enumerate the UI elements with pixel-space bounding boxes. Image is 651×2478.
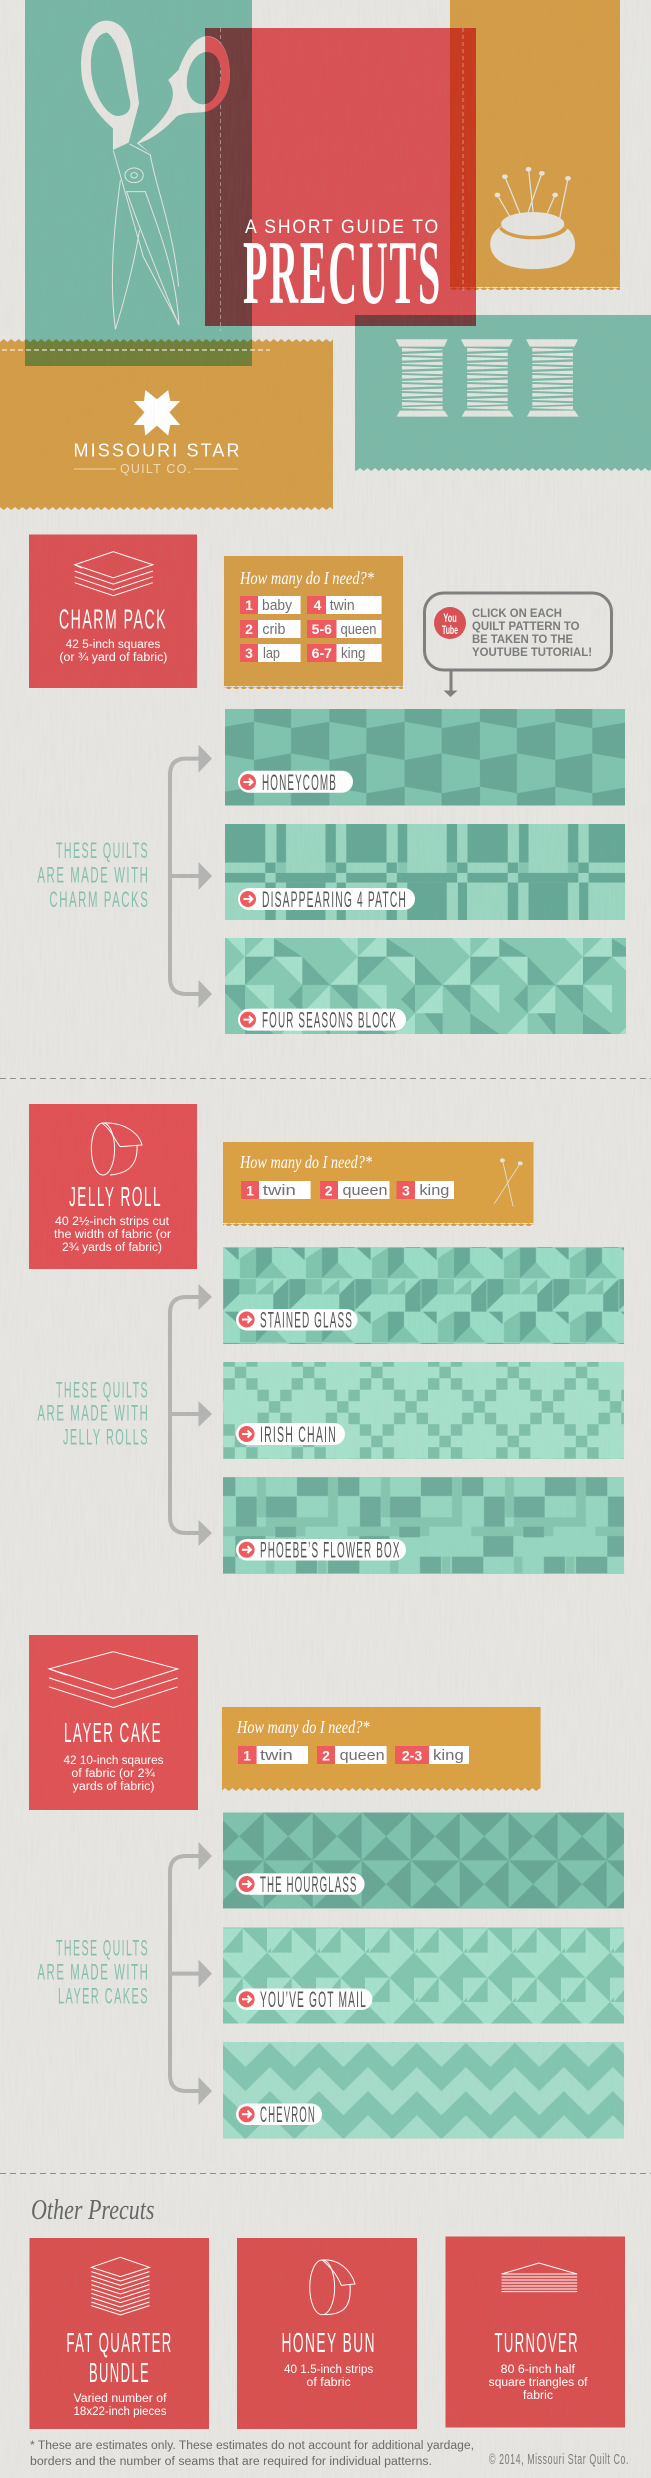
label pill [238, 770, 353, 795]
panel: honey bun: HONEY BUN [282, 2327, 376, 2358]
quilt: disappearing 4 patch [225, 824, 625, 920]
olive overlap strip [25, 339, 252, 366]
quilt: irish chain [223, 1362, 624, 1459]
label pill [236, 1538, 406, 1563]
callout text: QUILT PATTERN TO [472, 621, 580, 633]
size chips: queen [340, 1747, 385, 1764]
footnote: borders and the number of seams that are required for individual patterns. [30, 2456, 432, 2468]
heading: CHARM PACK [59, 604, 167, 634]
panel: charm pack [29, 534, 197, 688]
description: square triangles of [489, 2377, 588, 2389]
description: 2¾ yards of fabric) [62, 1242, 162, 1254]
description: 80 6-inch half [501, 2364, 576, 2376]
size chips: 2 [245, 621, 253, 637]
panel: honey bun [237, 2238, 417, 2429]
icon: stacked fat quarters [91, 2257, 149, 2315]
title: a short guide to: A SHORT GUIDE TO [245, 217, 440, 238]
panel: layer cake: LAYER CAKE [64, 1717, 162, 1748]
arrow bracket [170, 1284, 212, 1546]
description: 18x22-inch pieces [74, 2406, 167, 2418]
description [489, 2364, 588, 2402]
section: other precuts [30, 2194, 629, 2468]
size chips [238, 1746, 469, 1764]
size chips: 3 [245, 645, 253, 661]
description: yards of fabric) [73, 1781, 155, 1793]
description [74, 2393, 167, 2418]
size chips: 1 [245, 597, 253, 613]
panel: how many do I need [222, 1707, 541, 1791]
side label: ARE MADE WITH [37, 1960, 149, 1984]
icon: scissors [81, 21, 230, 329]
label pill [236, 1422, 345, 1447]
label pill [236, 1308, 358, 1332]
arrow bracket [170, 1842, 212, 2105]
size chips: king [341, 645, 365, 662]
size chips: twin [260, 1747, 293, 1764]
icon: knitting needles [494, 1158, 523, 1207]
panel: jelly roll [29, 1104, 197, 1269]
panel: fat quarter bundle: FAT QUARTER [66, 2327, 173, 2358]
quilt: you've got mail: YOU’VE GOT MAIL [260, 1987, 367, 2012]
icon: layered squares [49, 1652, 178, 1707]
side label [37, 1936, 149, 2008]
side label: ARE MADE WITH [37, 862, 149, 888]
wordmark: MISSOURI STAR [74, 440, 240, 460]
quilt: chevron: CHEVRON [260, 2102, 316, 2127]
header collage [0, 0, 651, 510]
size chips: 2-3 [402, 1748, 422, 1764]
quilt: the hourglass [223, 1812, 624, 1908]
description: 40 2½-inch strips cut [55, 1216, 170, 1228]
description [64, 1755, 164, 1793]
quilt: phoebe's flower box [223, 1477, 624, 1574]
size chips: 3 [402, 1182, 410, 1198]
side label: ARE MADE WITH [37, 1400, 149, 1426]
heading: How many do I need?* [236, 1717, 370, 1737]
heading: How many do I need?* [239, 568, 374, 588]
label pill [236, 1987, 372, 2012]
callout: youtube tutorial [424, 593, 612, 697]
size chips: 4 [314, 597, 322, 613]
description: 40 1.5-inch strips [284, 2364, 374, 2376]
quilt: phoebe's flower box: PHOEBE’S FLOWER BOX [260, 1538, 401, 1563]
section: layer cake: LAYER CAKES [58, 1984, 149, 2008]
icon: star [134, 390, 180, 436]
panel: layer cake [29, 1635, 198, 1810]
description: the width of fabric (or [54, 1229, 171, 1241]
callout text: BE TAKEN TO THE [472, 634, 573, 646]
logo: Missouri Star Quilt Co [74, 390, 240, 476]
heading: BUNDLE [89, 2357, 150, 2388]
quilt: stained glass: STAINED GLASS [260, 1308, 353, 1332]
quilt: honeycomb [225, 709, 625, 806]
size chips [241, 1181, 454, 1199]
side label: CHARM PACKS [49, 887, 149, 912]
footnote: * These are estimates only. These estimates do not account for additional yardage, [30, 2440, 474, 2452]
size chips: queen [342, 1182, 388, 1199]
size chips: queen [340, 621, 376, 638]
description: 42 10-inch sqaures [64, 1755, 164, 1767]
icon: youtube: Tube [442, 623, 458, 637]
icon: fabric roll [91, 1123, 142, 1175]
section: layer cake: THESE QUILTS [56, 1936, 149, 1960]
icon: youtube: You [443, 611, 457, 625]
footnote [30, 2440, 474, 2468]
red title panel [205, 28, 476, 326]
label pill [236, 2102, 322, 2127]
description: (or ¾ yard of fabric) [59, 652, 168, 664]
teal scissors panel [25, 0, 252, 366]
description [284, 2364, 374, 2389]
section: charm pack: THESE QUILTS [56, 838, 149, 863]
side label [37, 838, 149, 912]
description: Varied number of [74, 2393, 167, 2405]
section: jelly roll: JELLY ROLLS [63, 1424, 149, 1450]
description: of fabric (or 2¾ [71, 1768, 155, 1780]
heading: How many do I need?* [239, 1152, 372, 1172]
quilt: disappearing 4 patch: DISAPPEARING 4 PATCH [262, 887, 407, 912]
tagline: QUILT CO. [120, 462, 191, 476]
description [54, 1216, 171, 1254]
icon: fabric roll [310, 2260, 355, 2315]
quilt: stained glass [223, 1247, 624, 1344]
icon: stacked triangles [502, 2263, 577, 2292]
section: jelly roll: THESE QUILTS [56, 1378, 149, 1402]
label pill: HONEYCOMB [262, 770, 337, 795]
size chips: 2 [322, 1748, 330, 1764]
quilt: four seasons block [225, 938, 626, 1034]
teal spools panel [355, 315, 651, 471]
side label [37, 1378, 149, 1450]
mustard pincushion panel [450, 0, 620, 290]
description: fabric [523, 2390, 553, 2402]
section: jelly roll [29, 1104, 624, 1574]
callout text: CLICK ON EACH [472, 608, 562, 620]
size chips [240, 596, 382, 662]
size chips: king [433, 1747, 464, 1764]
heading: Other Precuts [31, 2194, 154, 2226]
size chips: 5-6 [312, 621, 332, 637]
description: of fabric [306, 2377, 351, 2389]
size chips: crib [262, 621, 285, 638]
callout text [472, 608, 592, 659]
size chips: 6-7 [312, 645, 332, 661]
size chips: twin [330, 597, 355, 614]
size chips: 2 [325, 1182, 333, 1198]
size chips: 1 [246, 1182, 254, 1198]
size chips: baby [262, 597, 292, 614]
panel: jelly roll: JELLY ROLL [69, 1181, 162, 1212]
label pill [238, 887, 415, 912]
mustard logo panel [0, 339, 333, 510]
size chips: king [419, 1182, 449, 1199]
section: charm pack [29, 534, 626, 1034]
size chips: lap [263, 645, 280, 662]
panel: fat quarter bundle [30, 2238, 209, 2429]
icon: pincushion [490, 167, 575, 269]
quilt: chevron [223, 2042, 624, 2139]
quilt: four seasons block: FOUR SEASONS BLOCK [262, 1007, 397, 1032]
quilt: you've got mail [223, 1928, 624, 2024]
size chips: twin [263, 1182, 296, 1199]
description [59, 639, 168, 664]
callout text: YOUTUBE TUTORIAL! [472, 647, 592, 659]
section: layer cake [29, 1635, 624, 2139]
size chips: 1 [243, 1748, 251, 1764]
label pill: IRISH CHAIN [260, 1422, 337, 1447]
icon: youtube [434, 607, 466, 639]
icon: thread spools [396, 339, 579, 417]
quilt: the hourglass: THE HOURGLASS [260, 1872, 358, 1897]
panel: turnover [446, 2236, 625, 2428]
arrow bracket [170, 745, 212, 1008]
description: 42 5-inch squares [66, 639, 161, 651]
icon: fabric squares stack [75, 552, 153, 596]
label pill [236, 1872, 365, 1897]
heading [66, 2327, 173, 2388]
panel: how many do I need [223, 1142, 534, 1226]
label pill [238, 1007, 406, 1032]
panel: how many do I need [224, 556, 403, 689]
